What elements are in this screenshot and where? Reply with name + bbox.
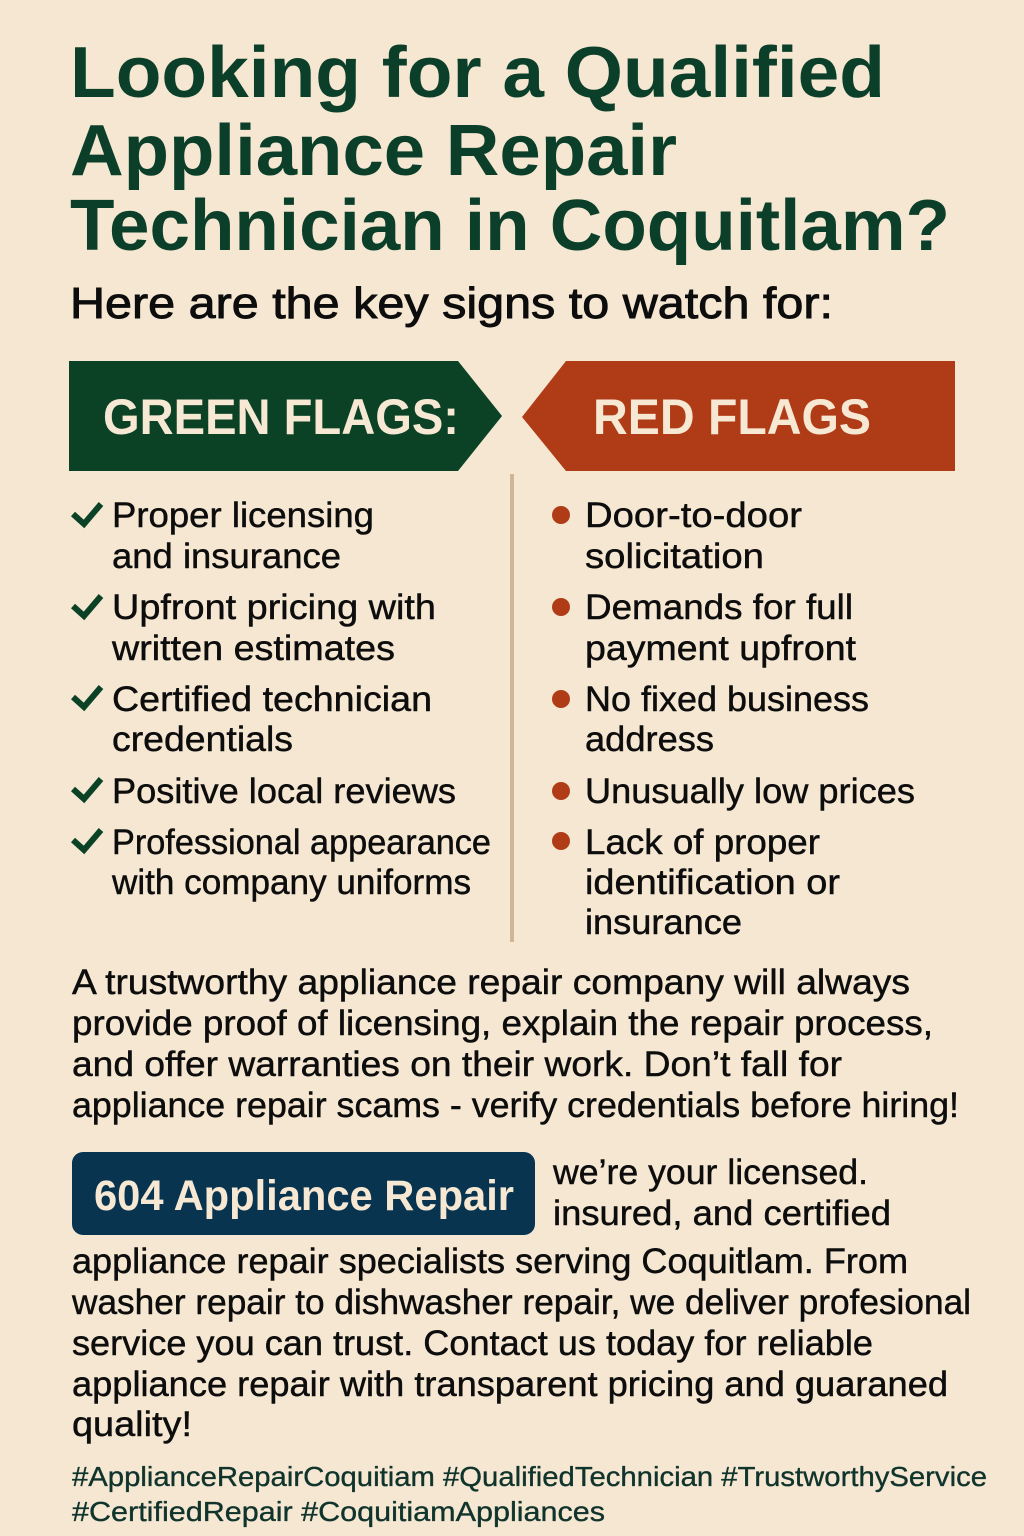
text block: company intro: we’re your licensed. (552, 1153, 868, 1192)
banner: red flags (522, 361, 955, 471)
item: upfront pricing: Upfront pricing with (112, 588, 436, 627)
item: full payment (552, 588, 856, 668)
item: no address (552, 680, 869, 759)
item: no address: address (585, 720, 714, 759)
text block: company intro: appliance repair specialists serving Coquitlam. From (72, 1242, 908, 1281)
item: lack of identification (552, 823, 840, 942)
item: proper licensing: Proper licensing (112, 496, 374, 535)
item: positive reviews: Positive local reviews (112, 772, 456, 811)
title: Technician in Coquitlam? (70, 186, 950, 266)
text block: trustworthy company: provide proof of licensing, explain the repair process, (72, 1004, 933, 1043)
banner: green flags: GREEN FLAGS: (103, 389, 459, 445)
text block: company intro: appliance repair with transparent pricing and guaraned (72, 1365, 948, 1404)
item: upfront pricing (73, 588, 436, 668)
item: professional appearance (73, 823, 491, 902)
text block: company intro (71, 1153, 971, 1444)
item: certified technician (73, 680, 432, 759)
item: door-to-door: solicitation (585, 537, 764, 576)
text block: company intro: service you can trust. Contact us today for reliable (72, 1324, 873, 1363)
text block: company intro: quality! (72, 1405, 192, 1444)
panel: red flags list (552, 496, 915, 942)
column divider (510, 474, 514, 942)
banner: red flags: RED FLAGS (593, 389, 871, 445)
item: full payment: Demands for full (585, 588, 853, 627)
item: certified technician: credentials (112, 720, 293, 759)
panel: green flags list (73, 496, 491, 902)
text block: trustworthy company: and offer warranties on their work. Don’t fall for (72, 1045, 842, 1084)
hashtags (72, 1461, 987, 1527)
text block: company intro: insured, and certified (553, 1194, 891, 1233)
item: full payment: payment upfront (585, 629, 856, 668)
subtitle: Here are the key signs to watch for: (70, 279, 833, 328)
title (70, 33, 950, 266)
item: certified technician: Certified technician (112, 680, 432, 719)
item: lack of identification: Lack of proper (585, 823, 820, 862)
item: low prices: Unusually low prices (585, 772, 915, 811)
text block: trustworthy company: A trustworthy appliance repair company will always (72, 963, 910, 1002)
hashtags: #CertifiedRepair #CoquitiamAppliances (72, 1496, 605, 1527)
text block: trustworthy company (72, 963, 959, 1125)
item: lack of identification: identification or (585, 863, 840, 902)
banner: green flags (69, 361, 502, 471)
hashtags: #ApplianceRepairCoquitiam #QualifiedTechnician #TrustworthyService (72, 1461, 987, 1492)
text block: company intro: washer repair to dishwasher repair, we deliver profesional (71, 1283, 971, 1322)
item: professional appearance: with company uniforms (111, 863, 471, 902)
item: door-to-door (552, 496, 802, 576)
title: Appliance Repair (70, 111, 677, 191)
item: professional appearance: Professional appearance (112, 823, 491, 862)
item: no address: No fixed business (585, 680, 869, 719)
item: proper licensing (73, 496, 374, 576)
item: door-to-door: Door-to-door (585, 496, 802, 535)
item: proper licensing: and insurance (112, 537, 341, 576)
badge: 604 Appliance Repair: 604 Appliance Repair (94, 1172, 514, 1220)
title: Looking for a Qualified (70, 33, 885, 113)
item: lack of identification: insurance (585, 903, 742, 942)
badge: 604 Appliance Repair (72, 1152, 535, 1235)
item: upfront pricing: written estimates (111, 629, 395, 668)
text block: trustworthy company: appliance repair scams - verify credentials before hiring! (72, 1086, 959, 1125)
